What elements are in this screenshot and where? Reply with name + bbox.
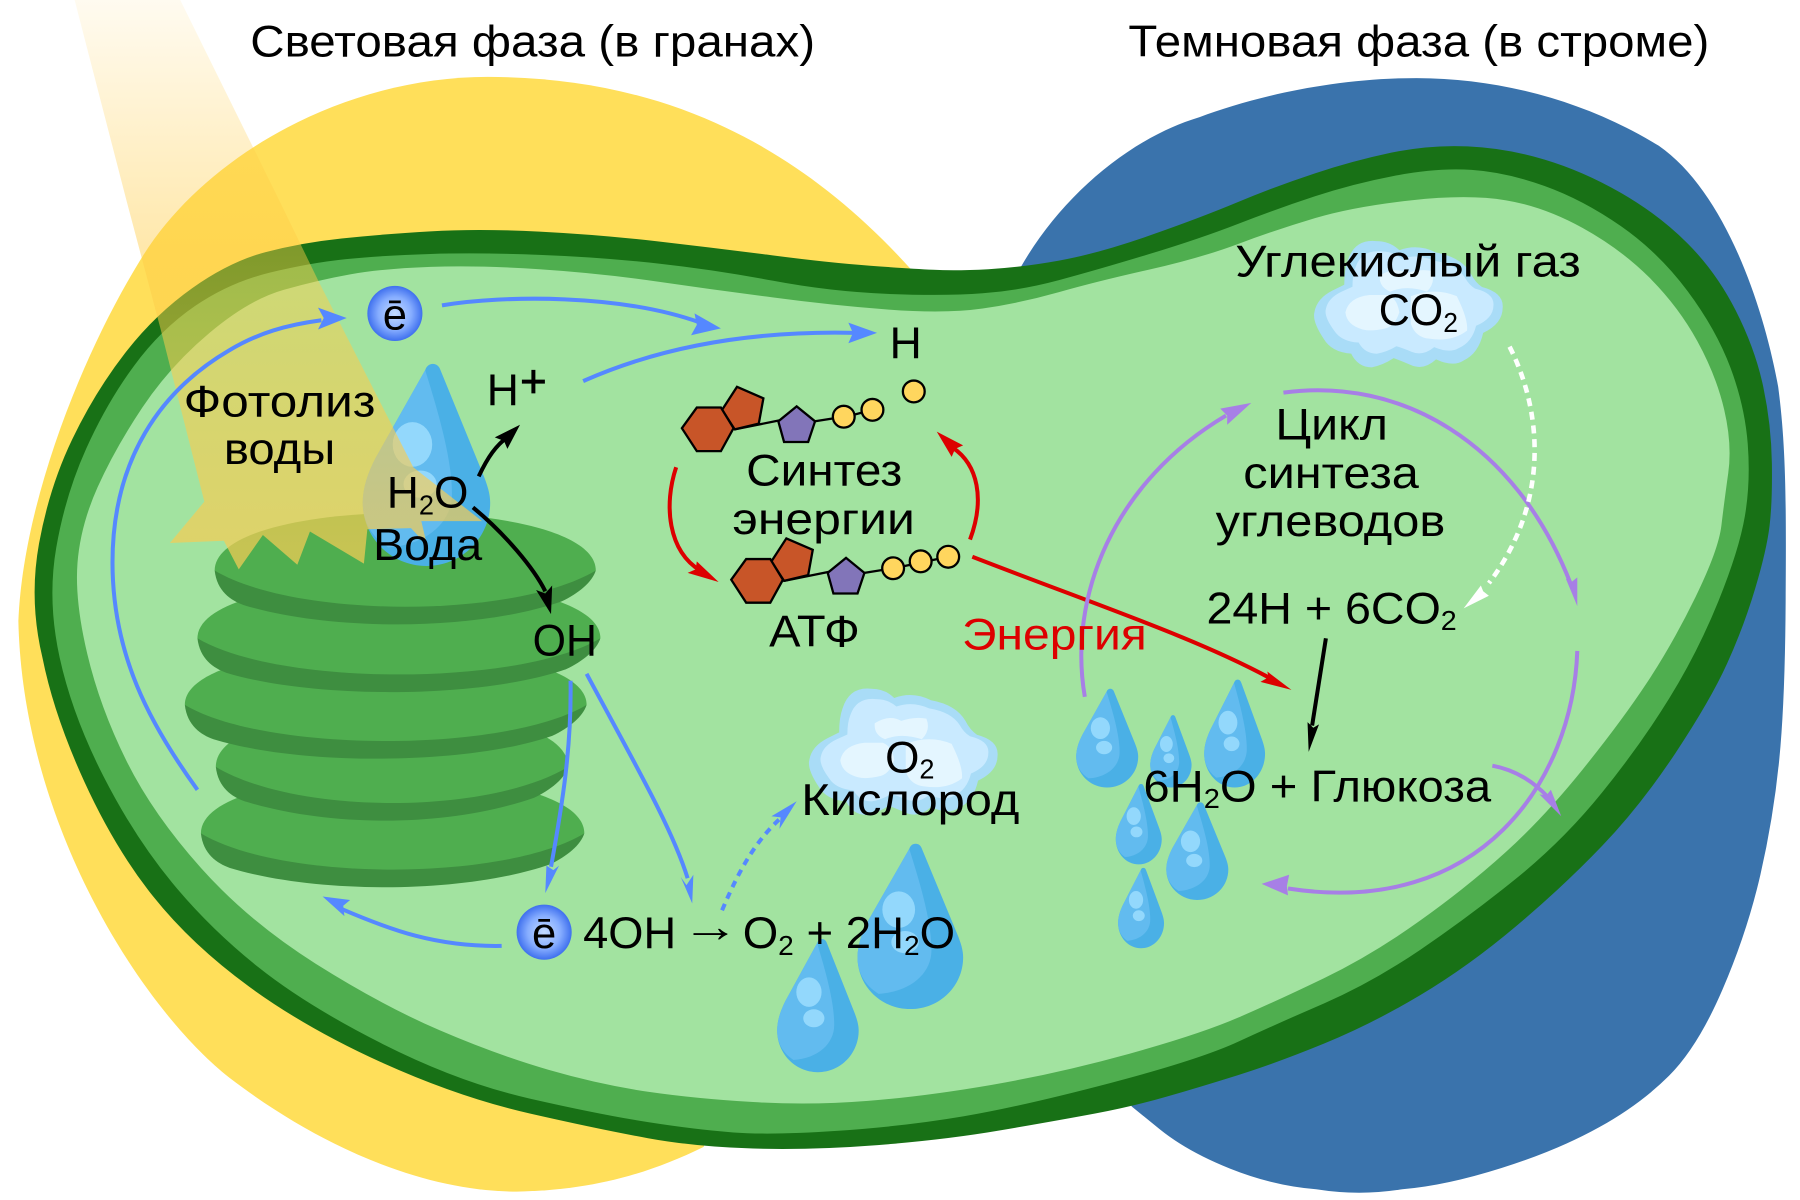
- equation: photolysis: 4OH: [583, 908, 676, 958]
- ATP molecule bottom: [731, 538, 959, 603]
- inner membrane: [52, 169, 1749, 1134]
- label: H2O: O: [434, 467, 468, 517]
- equation: products: 2: [1204, 783, 1220, 814]
- arrow: dotted to oxygen: [722, 801, 797, 910]
- label: energy: Энергия: [962, 610, 1147, 660]
- electron bottom: [517, 905, 572, 960]
- equation: products: 6H: [1143, 761, 1201, 811]
- yellow light-phase blob: [18, 77, 910, 1192]
- water drops near glucose: [1076, 680, 1265, 948]
- arrow: big left cycle: [112, 308, 347, 790]
- label: carbon dioxide: [1235, 237, 1581, 338]
- title: light phase: Световая фаза (в гранах): [250, 16, 815, 66]
- equation: photolysis: 2: [904, 930, 920, 961]
- label: H: H: [890, 318, 922, 368]
- label: H2O: 2: [419, 489, 434, 520]
- disc 5: [201, 776, 584, 887]
- water drop: [363, 364, 490, 566]
- label: water photolysis: Фотолиз: [184, 377, 375, 427]
- electron top: [367, 286, 422, 341]
- arrow: glucose out: [1492, 766, 1561, 816]
- label: H plus: [487, 355, 547, 415]
- arrow: electron back to granum: [323, 897, 502, 946]
- label: oxygen: [801, 733, 1019, 825]
- label: carbohydrate cycle: углеводов: [1216, 496, 1445, 546]
- arrow: electron to right: [442, 299, 721, 335]
- arrow: water to OH: [473, 507, 552, 614]
- label: oxygen: O: [885, 733, 920, 783]
- arrow: H plus to H: [583, 323, 877, 381]
- equation: photolysis: [583, 901, 955, 961]
- arrow: purple bottom arc: [1262, 651, 1577, 895]
- equation: photolysis: + 2H: [794, 908, 904, 958]
- label: carbon dioxide: CO: [1379, 285, 1446, 335]
- arrow: energy: [972, 557, 1291, 690]
- arrow: purple left arc: [1081, 403, 1251, 697]
- equation: reactants: 24H + 6CO: [1207, 583, 1432, 633]
- free phosphate: [903, 381, 925, 402]
- ATP molecule top: [682, 387, 883, 451]
- electron bottom: ē: [532, 910, 556, 958]
- label: energy synthesis: энергии: [732, 494, 915, 544]
- electron top: ē: [383, 291, 407, 339]
- arrow: purple top arc: [1283, 390, 1577, 606]
- granum stack: [185, 513, 600, 887]
- blue dark-phase blob: [1021, 78, 1786, 1193]
- arrow: reactants to products: [1308, 638, 1326, 752]
- arrow: water to H plus: [479, 425, 520, 476]
- arrow: OH to electron: [545, 681, 571, 893]
- disc 1: [215, 513, 596, 624]
- disc 3: [185, 647, 587, 759]
- label: H plus: H: [487, 365, 519, 415]
- equation: photolysis: →: [682, 901, 739, 951]
- label: oxygen: Кислород: [801, 775, 1019, 825]
- title: dark phase: Темновая фаза (в строме): [1128, 16, 1709, 66]
- label: OH: OH: [533, 615, 597, 665]
- disc 4: [216, 709, 568, 821]
- label: carbohydrate cycle: Цикл: [1275, 400, 1388, 450]
- equation: photolysis: O: [743, 908, 778, 958]
- label: oxygen: 2: [919, 753, 934, 784]
- label: energy synthesis: Синтез: [746, 446, 902, 496]
- arrow: ATP synthesis red down: [670, 467, 719, 582]
- disc 2: [197, 581, 600, 692]
- arrow: OH to equation: [587, 674, 693, 903]
- carbon dioxide cloud: [1314, 241, 1503, 367]
- label: carbohydrate cycle: синтеза: [1243, 448, 1419, 498]
- label: ATP: АТФ: [769, 606, 860, 656]
- label: water photolysis: воды: [224, 424, 335, 474]
- arrow: white dashed CO2: [1464, 347, 1535, 608]
- equation: reactants: 2: [1441, 605, 1457, 636]
- label: H2O: H: [387, 467, 419, 517]
- equation: products: O + Глюкоза: [1220, 761, 1491, 811]
- arrow: ATP synthesis red up: [937, 432, 978, 540]
- label: H plus: +: [520, 355, 547, 407]
- equation: photolysis: O: [920, 908, 955, 958]
- sunlight beam: [75, 0, 482, 569]
- water drops near oxygen: [777, 844, 963, 1072]
- oxygen cloud: [809, 689, 998, 815]
- stroma: [77, 197, 1730, 1104]
- label: water: Вода: [373, 520, 482, 570]
- label: carbon dioxide: 2: [1443, 307, 1458, 338]
- label: carbohydrate cycle: [1216, 400, 1445, 546]
- equation: photolysis: 2: [778, 930, 794, 961]
- label: energy synthesis: [732, 446, 915, 544]
- label: water photolysis: [184, 377, 375, 474]
- label: carbon dioxide: Углекислый газ: [1235, 237, 1581, 287]
